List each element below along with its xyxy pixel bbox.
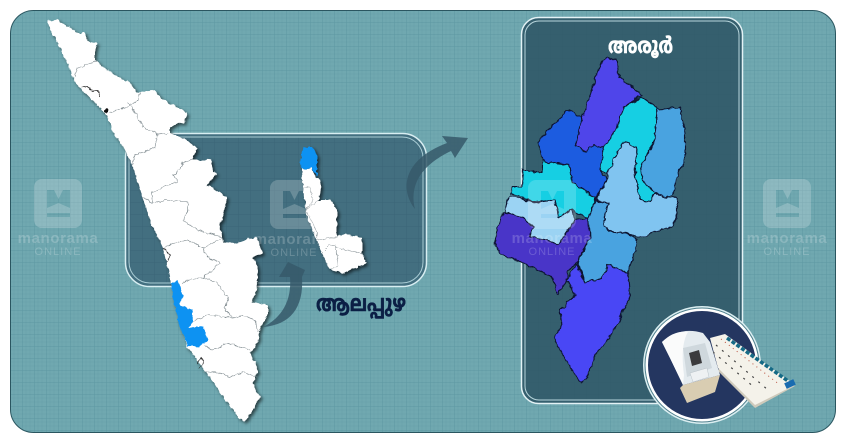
region: upper cyan (600, 97, 657, 202)
region: top purple (576, 57, 642, 152)
control unit hood (662, 331, 720, 385)
arrow: to Aroor panel (407, 136, 468, 209)
region: dark purple (494, 212, 590, 295)
watermark: Aroor panel: manorama (512, 230, 592, 247)
region: left cyan (510, 160, 595, 218)
watermark: inset: manorama (254, 231, 334, 248)
highlighted: Aroor (300, 147, 317, 177)
icon: voting machine (643, 306, 796, 424)
watermark: right: ONLINE (764, 246, 810, 258)
label: Aroor: അരൂർ (608, 33, 673, 58)
label: Alappuzha: ആലപ്പുഴ (316, 290, 406, 319)
watermark: inset: ONLINE (271, 247, 317, 259)
ballot unit (710, 334, 796, 408)
map: Aroor panchayats (494, 57, 685, 383)
arrow: to Alappuzha inset (263, 262, 305, 327)
watermark: left: ONLINE (35, 246, 81, 258)
region: blue (538, 110, 607, 198)
watermark: left: manorama (18, 230, 98, 247)
district boundaries (75, 61, 260, 377)
region: left light blue (505, 195, 575, 245)
watermark: Aroor panel (512, 180, 592, 258)
map: Kerala state (47, 19, 268, 422)
region: lower blue (578, 201, 637, 283)
panel: Aroor constituency (522, 18, 742, 404)
region: bottom purple (553, 263, 630, 383)
region: central light blue (595, 142, 677, 238)
region: right blue (640, 107, 685, 197)
watermark: right (747, 179, 827, 258)
watermark: Aroor panel: ONLINE (529, 246, 575, 258)
watermark: inset (254, 180, 334, 259)
control unit base (680, 375, 720, 403)
watermark: left (18, 179, 98, 258)
backwaters (82, 86, 204, 368)
watermark: right: manorama (747, 230, 827, 247)
screen (689, 350, 702, 366)
map: Alappuzha district (300, 147, 367, 273)
highlighted district: Alappuzha (171, 280, 208, 348)
panel: Alappuzha inset (126, 134, 426, 286)
